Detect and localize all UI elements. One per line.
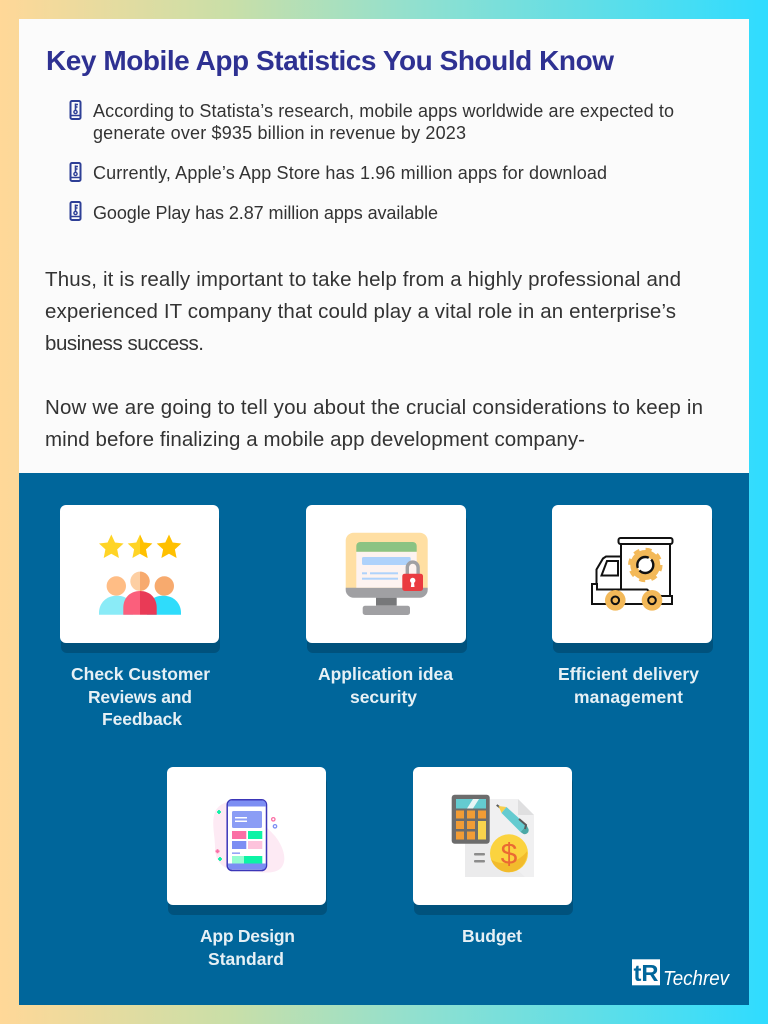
logo: Techrev (632, 959, 730, 990)
panel: introduction (19, 19, 749, 473)
icon: bullet phone 1 (70, 101, 80, 119)
bullet text 1: According to Statista’s research, mobile apps worldwide are expected to (93, 101, 674, 121)
label: efficient delivery management (558, 664, 699, 707)
card: application idea security (306, 505, 467, 707)
card: budget (413, 767, 573, 946)
label: customer reviews: Feedback (102, 709, 182, 729)
bullet text 3: Google Play has 2.87 million apps available (93, 203, 438, 223)
label: application idea security (318, 664, 453, 707)
panel: considerations (19, 473, 749, 1005)
paragraph: considerations: Now we are going to tell you about the crucial considerations to keep in (45, 396, 703, 419)
label: customer reviews (71, 664, 210, 729)
paragraph: importance of IT company (45, 268, 681, 355)
icon: calculator, pen and coin: $ (501, 838, 518, 871)
bullet text 1: generate over $935 billion in revenue by 2023 (93, 123, 466, 143)
title: Key Mobile App Statistics You Should Know (46, 45, 614, 76)
label: application idea security: security (350, 687, 417, 707)
paragraph: importance of IT company: business success. (45, 332, 204, 355)
icon: stars and people (99, 534, 181, 615)
card: customer reviews (60, 505, 220, 729)
icon: truck with gear (592, 538, 672, 611)
icon: calculator, pen and coin (452, 795, 534, 877)
label: customer reviews: Check Customer (71, 664, 210, 684)
card: app design standard (167, 767, 327, 969)
label: efficient delivery management: management (574, 687, 683, 707)
label: customer reviews: Reviews and (88, 687, 192, 707)
paragraph: importance of IT company: experienced IT company that could play a vital role in an enterprise’s (45, 300, 676, 323)
bullet text 2: Currently, Apple’s App Store has 1.96 million apps for download (93, 163, 607, 183)
label: efficient delivery management: Efficient delivery (558, 664, 699, 684)
bullet text 1 (93, 101, 674, 143)
logo: Techrev: Techrev (663, 968, 730, 990)
label: app design standard: Standard (208, 949, 284, 969)
paragraph: considerations (45, 396, 703, 451)
paragraph: importance of IT company: Thus, it is really important to take help from a highly professional and (45, 268, 681, 291)
label: app design standard: App Design (200, 926, 295, 946)
label: app design standard (200, 926, 295, 969)
paragraph: considerations: mind before finalizing a mobile app development company- (45, 428, 585, 451)
logo: Techrev: tR (634, 960, 659, 986)
icon: bullet phone 2 (70, 163, 80, 181)
card: efficient delivery management (552, 505, 713, 707)
bullet list (70, 101, 674, 223)
label: budget: Budget (462, 926, 522, 946)
icon: bullet phone 3 (70, 202, 80, 220)
label: application idea security: Application idea (318, 664, 453, 684)
icon: phone app design (213, 800, 284, 873)
icon: monitor with padlock (346, 533, 428, 615)
